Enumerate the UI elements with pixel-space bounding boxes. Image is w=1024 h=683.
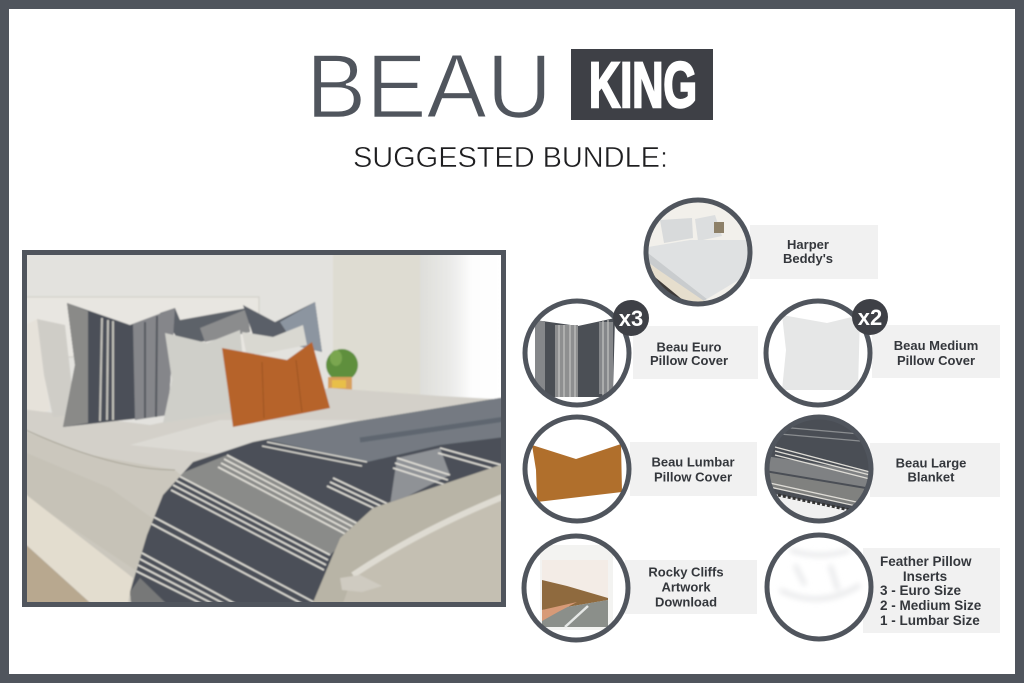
label: Feather Pillow Inserts	[863, 548, 1000, 633]
badge: KING	[571, 49, 713, 121]
label: Beau Euro Pillow Cover	[633, 326, 758, 379]
item: Feather pillow inserts image	[767, 535, 871, 639]
badge: x3: x3	[619, 306, 643, 331]
label: Beau Lumbar Pillow Cover	[630, 442, 757, 496]
item: Beau Lumbar pillow image	[525, 417, 629, 521]
label: Beau Large Blanket: Beau Large	[896, 456, 966, 470]
label: Beau Medium Pillow Cover: Beau Medium	[894, 338, 978, 353]
label: Beau Medium Pillow Cover	[872, 325, 1000, 378]
bed frame	[27, 495, 133, 602]
label: Harper Beddy's: Harper	[787, 237, 829, 252]
blanket	[129, 396, 501, 602]
label: Feather Pillow Inserts: Inserts	[903, 569, 947, 584]
label: Beau Lumbar Pillow Cover: Pillow Cover	[654, 470, 732, 484]
badge: x2	[852, 299, 888, 335]
label: Beau Euro Pillow Cover: Pillow Cover	[650, 353, 728, 368]
label: Feather Pillow Inserts: 3 - Euro Size	[880, 583, 962, 598]
white pillows	[242, 325, 307, 357]
badge: x2: x2	[858, 305, 882, 330]
front euro pillow	[63, 303, 175, 427]
title: BEAU: BEAU	[306, 36, 552, 138]
label: Rocky Cliffs Artwork Download	[625, 560, 757, 614]
label: Rocky Cliffs Artwork Download: Artwork	[661, 580, 711, 594]
label: Harper Beddy's	[750, 225, 878, 279]
item: Beau Euro pillow image	[525, 301, 629, 405]
mattress top	[27, 387, 492, 476]
walls	[27, 255, 334, 426]
subtitle: SUGGESTED BUNDLE:	[353, 142, 668, 174]
label: Beau Large Blanket: Blanket	[908, 470, 955, 484]
label: Beau Lumbar Pillow Cover: Beau Lumbar	[651, 454, 735, 470]
label: Feather Pillow Inserts: Feather Pillow	[880, 554, 972, 569]
badge: KING: KING	[589, 49, 697, 121]
label: Rocky Cliffs Artwork Download: Rocky Cliffs	[648, 564, 724, 580]
label: Beau Large Blanket	[870, 443, 1000, 497]
badge: x3	[613, 300, 649, 336]
label: Feather Pillow Inserts: 2 - Medium Size	[880, 598, 982, 613]
mattress side	[27, 433, 180, 602]
label: Feather Pillow Inserts: 1 - Lumbar Size	[880, 613, 980, 628]
back pillows	[27, 356, 41, 358]
item: Harper Beddy's image	[644, 200, 750, 312]
panel: bedroom photo	[15, 245, 520, 615]
label: Harper Beddy's: Beddy's	[783, 251, 833, 266]
label: Rocky Cliffs Artwork Download: Download	[655, 594, 717, 610]
headboard	[15, 297, 259, 357]
item: Rocky Cliffs artwork image	[524, 536, 628, 640]
item: Beau Medium pillow image	[766, 301, 870, 405]
back euro pillows	[160, 308, 250, 342]
item: Beau Large Blanket image	[765, 417, 872, 525]
orange lumbar pillow	[222, 342, 330, 427]
label: Beau Medium Pillow Cover: Pillow Cover	[897, 353, 975, 368]
plant	[326, 349, 358, 390]
label: Beau Euro Pillow Cover: Beau Euro	[656, 340, 722, 354]
